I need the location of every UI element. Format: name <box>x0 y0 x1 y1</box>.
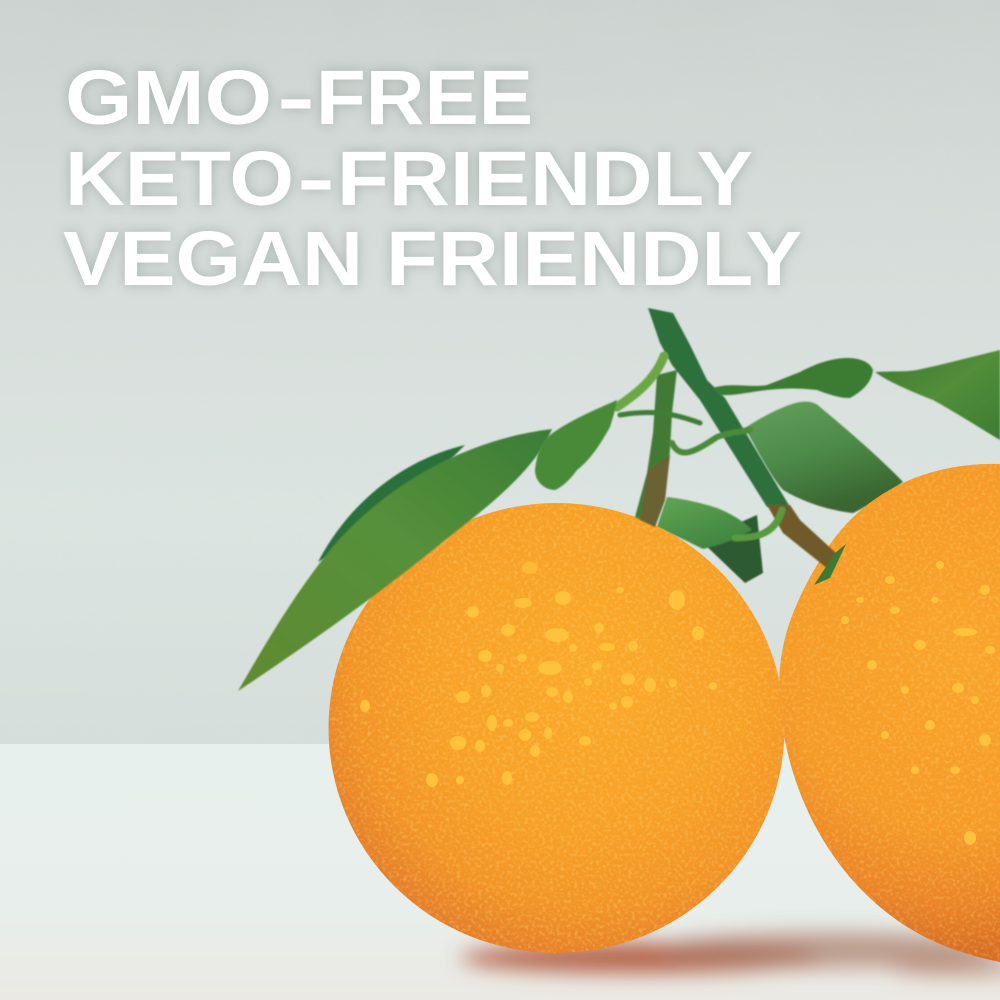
main orange <box>325 500 790 958</box>
back leaf: dark green behind large leaf <box>318 445 465 562</box>
orange shadow on table <box>460 932 1000 976</box>
right orange <box>770 455 1000 970</box>
headline line 2: KETO <box>65 136 294 222</box>
background: wall <box>0 0 1000 745</box>
back leaf: right speckled leaf <box>745 402 903 513</box>
large front leaf <box>238 429 552 691</box>
headline line 1: GMO <box>65 55 272 141</box>
headline line 1: FREE <box>316 55 533 141</box>
background: table surface <box>0 744 1000 1000</box>
headline line 3: FRIENDLY <box>386 216 802 302</box>
water droplets on right orange <box>841 561 995 845</box>
top right small leaf <box>713 358 873 398</box>
second branch <box>635 370 677 527</box>
headline line 2: FRIENDLY <box>337 136 753 222</box>
thin stems <box>617 356 782 538</box>
headline line 3: VEGAN <box>63 216 363 302</box>
low leaf behind main orange <box>657 497 763 583</box>
stems and branches <box>617 308 836 569</box>
small bud leaf <box>535 400 617 490</box>
far right leaf <box>875 350 1000 440</box>
headline <box>63 55 802 302</box>
water droplets on main orange <box>360 562 717 787</box>
stem nub on right orange <box>814 544 846 585</box>
headline line 1: - <box>277 55 315 141</box>
headline line 2: - <box>297 136 335 222</box>
main stem <box>648 308 790 507</box>
